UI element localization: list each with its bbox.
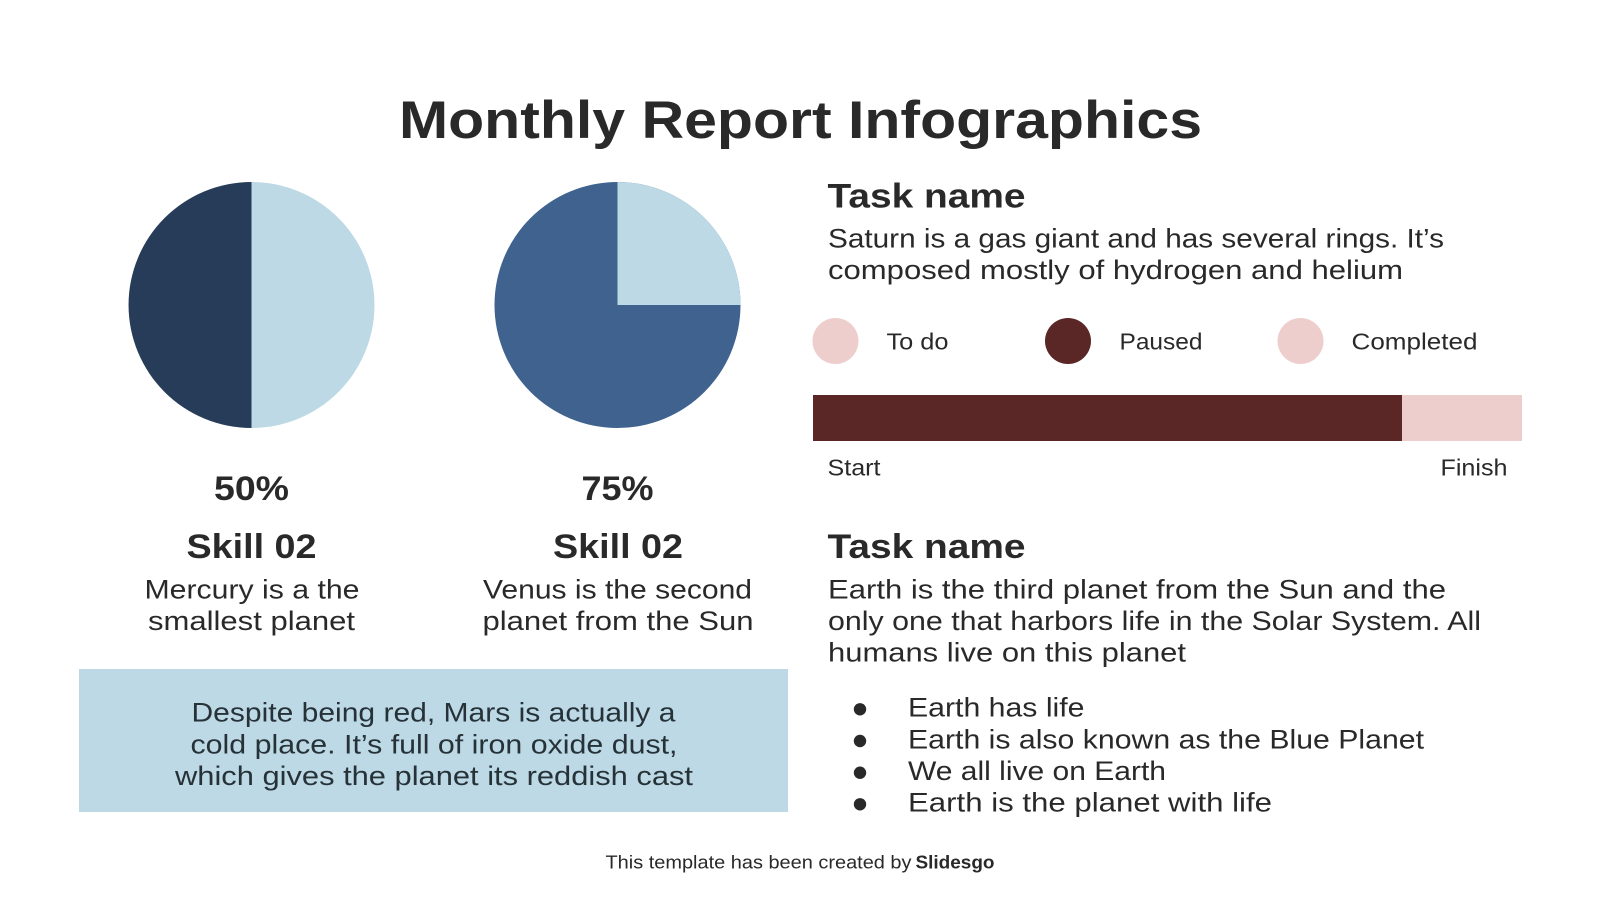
legend: to do (812, 318, 948, 364)
panel: skill 1 (129, 182, 374, 636)
skill 1 percentage: 50% (214, 470, 289, 508)
skill 1 description: smallest planet (148, 606, 356, 636)
title: Monthly Report Infographics (399, 91, 1202, 150)
bullet list: Earth is the planet with life (908, 788, 1272, 818)
skill 2 heading: Skill 02 (553, 528, 683, 566)
skill 2 description: Venus is the second (483, 574, 752, 604)
task 2 description (828, 574, 1481, 668)
panel: task 1 (812, 177, 1522, 481)
task 2 description: only one that harbors life in the Solar System. All (828, 606, 1481, 636)
skill 1 description (144, 574, 360, 636)
task 1 heading: Task name (828, 177, 1026, 215)
skill 2 description (482, 574, 754, 636)
callout: Mars: which gives the planet its reddish cast (174, 761, 694, 791)
skill 1 heading: Skill 02 (186, 528, 316, 566)
legend: completed: Completed (1352, 328, 1478, 354)
label: start: Start (828, 455, 881, 481)
footer credit: Slidesgo (916, 852, 995, 872)
footer credit: This template has been created by (606, 852, 912, 872)
legend: paused (1045, 318, 1202, 364)
callout: Mars: cold place. It’s full of iron oxide dust, (190, 729, 678, 759)
legend: paused: Paused (1120, 328, 1202, 354)
skill 1 description: Mercury is a the (144, 574, 360, 604)
panel: skill 2 (482, 182, 754, 636)
panel: task 2 (828, 528, 1481, 818)
progress bar (813, 395, 1522, 441)
pie chart: 50% (129, 182, 374, 428)
task 1 description: Saturn is a gas giant and has several rings. It’s (828, 223, 1444, 253)
task 2 description: Earth is the third planet from the Sun and the (828, 574, 1446, 604)
task 1 description (828, 223, 1444, 285)
legend: to do: To do (886, 328, 948, 354)
callout: Mars: Despite being red, Mars is actually a (192, 698, 677, 728)
callout: Mars (79, 669, 788, 812)
legend (812, 318, 1478, 364)
skill 2 percentage: 75% (582, 470, 654, 508)
label: finish: Finish (1440, 455, 1508, 481)
task 2 heading: Task name (828, 528, 1026, 566)
pie chart: 75% (494, 182, 740, 428)
task 2 description: humans live on this planet (828, 638, 1187, 668)
task 1 description: composed mostly of hydrogen and helium (828, 255, 1403, 285)
bullet list (854, 693, 1425, 818)
bullet list: We all live on Earth (908, 756, 1166, 786)
bullet list: Earth has life (908, 693, 1084, 723)
bullet list: Earth is also known as the Blue Planet (908, 724, 1425, 754)
skill 2 description: planet from the Sun (482, 606, 754, 636)
legend: completed (1278, 318, 1478, 364)
